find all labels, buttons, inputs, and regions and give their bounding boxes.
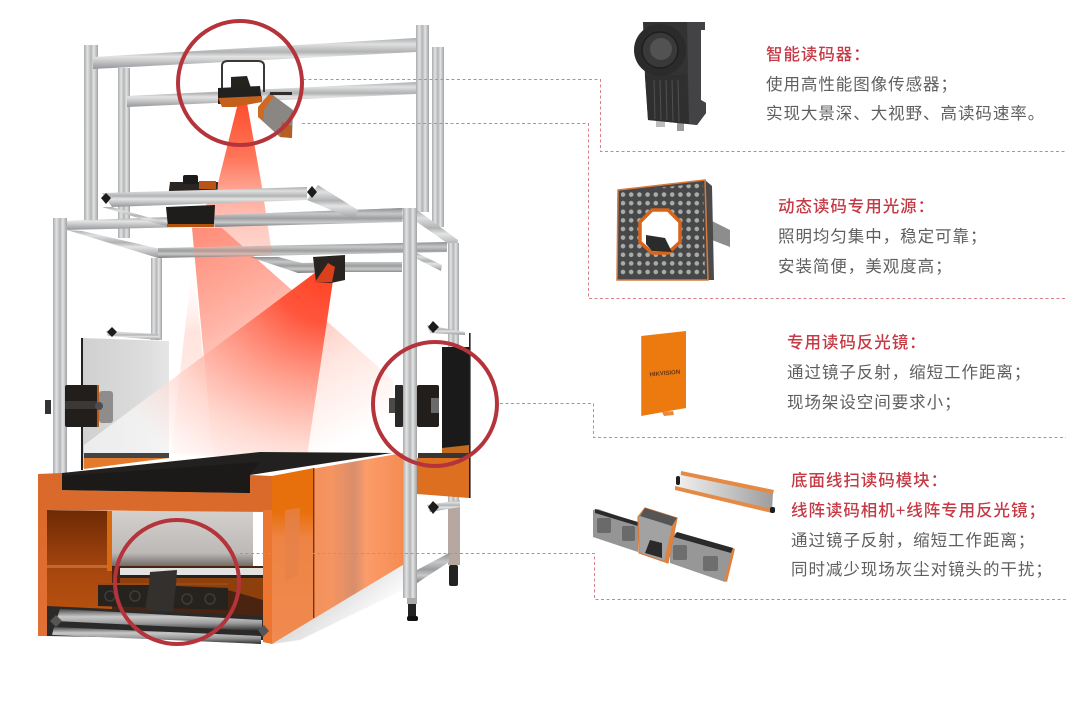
conveyor table [38, 452, 403, 644]
text block: bottom line-scan module: 同时减少现场灰尘对镜头的干扰； [791, 561, 1053, 579]
text block: dedicated mirror [787, 334, 1031, 412]
back aluminium frame [84, 25, 444, 238]
middle reading frame with camera [101, 175, 402, 227]
right posts, mirror and camera [389, 208, 471, 621]
top smart code reader and light [218, 61, 293, 138]
text block: dedicated light source: 照明均匀集中，稳定可靠； [778, 228, 987, 246]
icon: bottom line-scan module product [593, 471, 775, 582]
overhead camera with red beam [313, 255, 345, 283]
icon: dedicated mirror product: HIKVISION [649, 370, 680, 378]
text block: dedicated mirror: 专用读码反光镜： [787, 334, 927, 352]
text block: dedicated light source: 动态读码专用光源： [778, 198, 935, 216]
front aluminium frame top [63, 208, 458, 340]
text block: bottom line-scan module [791, 472, 1053, 579]
text block: dedicated light source [778, 198, 987, 276]
text block: smart code reader [766, 46, 1045, 123]
text block: bottom line-scan module: 线阵读码相机+线阵专用反光镜； [791, 502, 1046, 520]
text block: smart code reader: 使用高性能图像传感器； [766, 76, 958, 94]
left mirror base and camera [45, 218, 169, 476]
highlight circle: mirror [373, 342, 497, 466]
highlight circle: code reader [178, 21, 302, 145]
text block: dedicated mirror: 通过镜子反射，缩短工作距离； [787, 364, 1031, 382]
icon: dedicated mirror product [641, 331, 686, 416]
icon: smart code reader product [634, 22, 706, 131]
light beams [84, 103, 396, 456]
highlight circle: bottom module [115, 520, 239, 644]
floor shadow [272, 565, 403, 644]
dashed connector lines [240, 80, 1066, 600]
text block: bottom line-scan module: 底面线扫读码模块： [791, 472, 948, 490]
icon: dedicated light source product [617, 180, 730, 280]
text block: dedicated mirror: 现场架设空间要求小； [787, 394, 962, 412]
bottom line-scan module [50, 570, 269, 644]
text block: bottom line-scan module: 通过镜子反射，缩短工作距离； [791, 532, 1035, 550]
text block: smart code reader: 智能读码器： [766, 46, 871, 64]
left grey mirror panel [81, 338, 169, 470]
text block: smart code reader: 实现大景深、大视野、高读码速率。 [766, 105, 1045, 123]
text block: dedicated light source: 安装简便，美观度高； [778, 258, 953, 276]
